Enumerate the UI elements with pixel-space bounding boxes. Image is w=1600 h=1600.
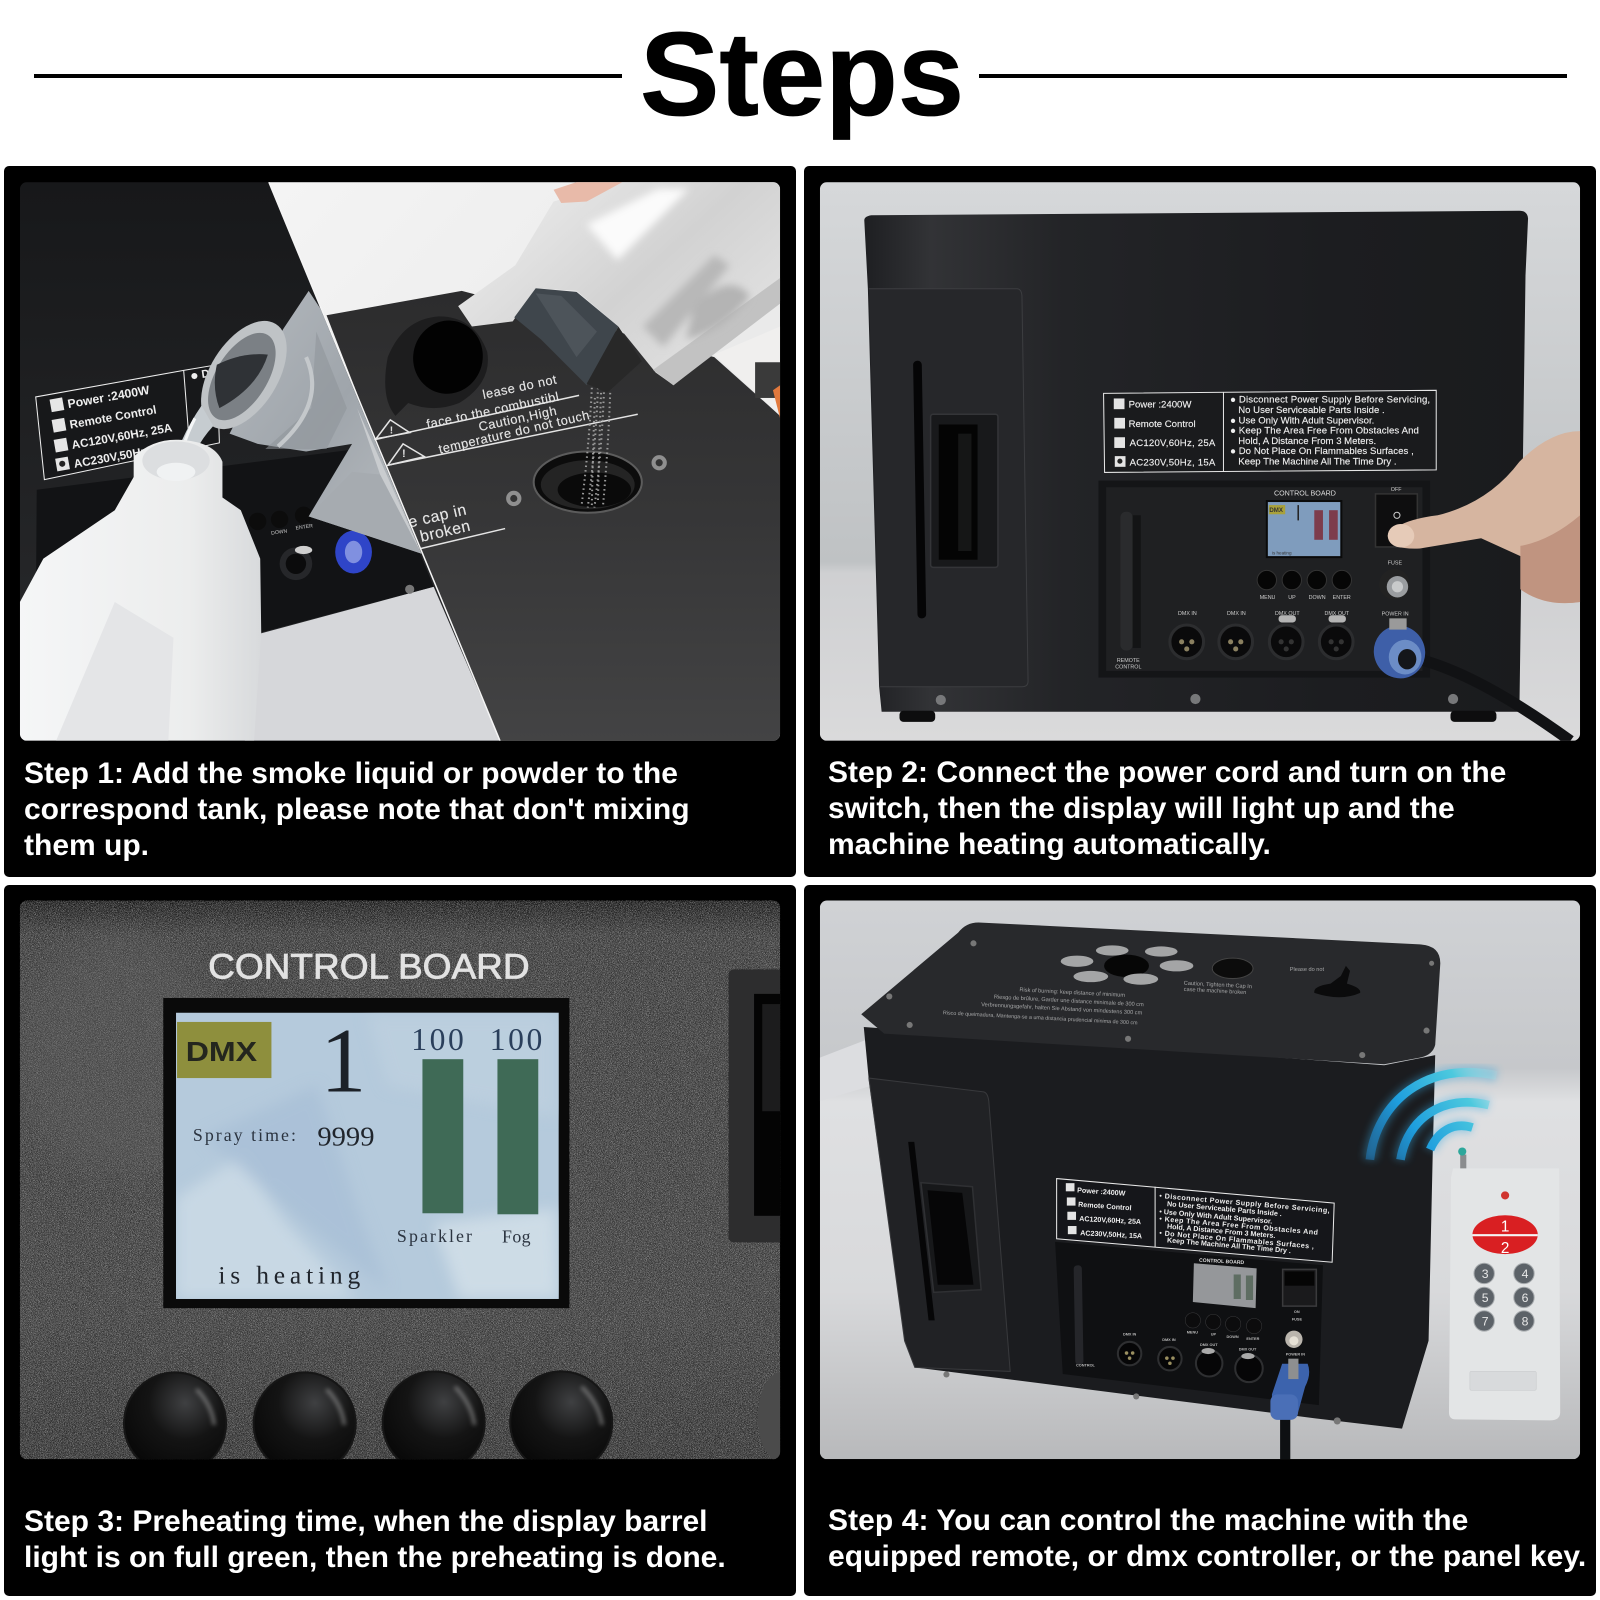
plate text: broken (419, 518, 472, 546)
spec label: AC120V,60Hz, 25A (1079, 1215, 1141, 1226)
remote control: 6 (1522, 1291, 1529, 1305)
spec label: AC230V,50Hz, 15A (1130, 457, 1216, 468)
control board: DMX IN (1123, 1333, 1137, 1337)
spec label (36, 365, 219, 480)
plate text (407, 372, 591, 546)
control board: DMX OUT (1200, 1343, 1218, 1347)
panel: step 3 (4, 885, 809, 1596)
machine body (864, 211, 1528, 722)
plate text: face to the combustibl (425, 389, 560, 432)
control board: MENU (1260, 595, 1276, 601)
plate text: e cap in (407, 502, 468, 531)
top plate holes and vents: Verbrennungsgefahr, halten Sie Abstand von mindestens 300 cm (981, 1002, 1143, 1017)
remote control (1449, 1147, 1560, 1420)
remote control: 1 (1501, 1219, 1509, 1236)
spec label: • Disconnect Power Supply Before Servicing, (1159, 1192, 1330, 1215)
photo: pouring liquid and powder into tanks: ! (390, 426, 393, 437)
caption: step 2: Step 2: Connect the power cord and turn on the (828, 756, 1506, 789)
caption: step 1: Step 1: Add the smoke liquid or powder to the (24, 757, 678, 790)
LCD screen: 1 (320, 1009, 366, 1111)
control board: CONTROL BOARD (1199, 1258, 1245, 1266)
caption: step 4: equipped remote, or dmx controller, or the panel key. (828, 1540, 1586, 1573)
LCD screen: Fog (502, 1226, 531, 1246)
control board: CONTROL BOARD (1274, 489, 1336, 497)
title: Steps with side rules: Steps (640, 8, 964, 141)
spec label: ● Keep The Area Free From Obstacles And (1230, 426, 1419, 437)
panel: step 2 (804, 166, 1596, 877)
remote control: 8 (1522, 1315, 1529, 1329)
control board: FUSE (1388, 560, 1402, 566)
remote control: 5 (1482, 1291, 1489, 1305)
control board: DMX (1269, 507, 1284, 514)
spec label: Remote Control (1129, 419, 1196, 430)
caption: step 4: Step 4: You can control the machine with the (828, 1504, 1468, 1537)
caption: step 3: light is on full green, then the preheating is done. (24, 1541, 726, 1574)
top plate holes and vents: case the machine broken (1184, 987, 1246, 996)
spec label: Keep The Machine All The Time Dry . (1238, 456, 1397, 467)
control board: is heating (1272, 551, 1292, 556)
remote control: 2 (1501, 1240, 1509, 1257)
remote control: 7 (1482, 1315, 1489, 1329)
rocker switch (728, 969, 780, 1242)
spec label: AC230V,50Hz, 15A (73, 440, 176, 471)
spec label: AC120V,60Hz, 25A (1130, 438, 1216, 449)
control board: CONTROL (1115, 664, 1141, 670)
lower table left (245, 587, 500, 741)
control board: ENTER (1246, 1337, 1260, 1341)
control board: UP (1211, 1333, 1216, 1337)
photo: pouring liquid and powder into tanks: ! (402, 448, 406, 460)
icon: wireless signal arcs (1370, 1072, 1496, 1160)
top plate holes and vents (886, 940, 1434, 1424)
control recess left (36, 449, 434, 633)
heading: control board: CONTROL BOARD (208, 948, 530, 987)
title: Steps with side rules (34, 8, 1567, 141)
top plate holes and vents: Riesgo de brûlure, Garder une distance minimale de 300 cm (994, 994, 1144, 1008)
handle (921, 1183, 981, 1292)
LCD screen: DMX (186, 1036, 258, 1067)
top plate holes and vents: Please do not (1290, 967, 1325, 973)
control board: DMX OUT (1324, 611, 1350, 617)
spec label: • Do Not Place On Flammables Surfaces , (1159, 1229, 1314, 1251)
foil bag (458, 182, 780, 393)
photo: rear of machine with power switch (820, 182, 1580, 741)
spec label: Remote Control (69, 403, 157, 432)
control board: DOWN (1227, 1335, 1239, 1339)
machine (861, 922, 1440, 1429)
spec label: Hold, A Distance From 3 Meters. (1167, 1223, 1276, 1240)
spec label: Hold, A Distance From 3 Meters. (1238, 436, 1376, 447)
control board: POWER IN (1286, 1353, 1305, 1357)
control board: ENTER (1333, 595, 1351, 601)
photo: pouring liquid and powder into tanks (20, 182, 780, 741)
icon: black cap (385, 313, 491, 416)
plate text: Caution,High (477, 403, 558, 434)
control board (1098, 481, 1430, 678)
plate text: temperature do not touch (437, 407, 591, 456)
LCD screen: 9999 (317, 1120, 374, 1151)
control board: FUSE (1292, 1317, 1302, 1321)
LCD screen: Sparkler (397, 1226, 472, 1246)
fuse knob (758, 1372, 780, 1460)
control board (1055, 1242, 1323, 1405)
icon: blue powercon plug and cable (1270, 1359, 1309, 1459)
control board: DMX IN (1227, 611, 1246, 617)
control board: ON (1294, 1310, 1300, 1314)
spec label: ● Do Not Place On Flammables Surfaces , (1230, 446, 1414, 457)
white jug (20, 440, 261, 741)
spec label: Power :2400W (1077, 1186, 1126, 1198)
screws (936, 694, 1458, 705)
control board: DMX OUT (1275, 611, 1300, 617)
white seam between halves (269, 182, 500, 741)
liquid stream (182, 406, 213, 444)
photo: pouring liquid and powder into tanks: ENTER (295, 523, 314, 532)
powder stream (582, 388, 610, 508)
control board: MENU (1187, 1331, 1198, 1335)
spec label: Keep The Machine All The Time Dry . (1167, 1236, 1291, 1255)
icon: tank hole (534, 452, 642, 513)
right plate with tank holes (327, 291, 780, 741)
control board: OFF (1391, 487, 1402, 493)
photo: pouring liquid and powder into tanks: DOWN (271, 528, 288, 537)
icon: blue powercon plug and cable (1365, 617, 1570, 741)
control board: REMOTE (1117, 658, 1140, 664)
LCD screen (163, 998, 569, 1308)
caption: step 1: them up. (24, 829, 149, 862)
spec label: • Keep The Area Free From Obstacles And (1159, 1215, 1318, 1237)
spec label: No User Serviceable Parts Inside . (1238, 405, 1385, 416)
spec label (1057, 1179, 1334, 1262)
hand pressing switch (1388, 431, 1580, 603)
top plate holes and vents: Risk of burning: keep distance of minimum (1019, 987, 1125, 999)
photo: LCD control board close-up (15, 901, 809, 1474)
panel: step 1 (4, 166, 796, 877)
spec label: Di (201, 368, 214, 381)
remote control: 4 (1522, 1267, 1529, 1281)
spec label: ● Disconnect Power Supply Before Servicing, (1230, 395, 1430, 406)
control board: DMX OUT (1239, 1348, 1257, 1352)
top plate holes and vents: Caution, Tighten the Cap In (1184, 981, 1252, 990)
door handle (931, 414, 998, 567)
control board: UP (1288, 595, 1296, 601)
DMX badge (177, 1022, 271, 1078)
panel: step 4 (804, 885, 1596, 1596)
LCD screen: is heating (218, 1261, 360, 1290)
spec label (1104, 390, 1436, 472)
control board: CONTROL (1076, 1363, 1096, 1367)
photo: machine with wireless remote (820, 901, 1580, 1459)
spec label: AC230V,50Hz, 15A (1080, 1229, 1142, 1240)
plate text: lease do not (481, 372, 558, 402)
top plate holes and vents: Risco de queimadura, Mantenga-se a uma distancia prudencial minima de 300 cm (943, 1010, 1138, 1027)
LCD screen: 100 (411, 1022, 466, 1057)
remote control: 3 (1482, 1267, 1489, 1281)
control board: POWER IN (1382, 611, 1409, 617)
spec label: ● Use Only With Adult Supervisor. (1230, 415, 1374, 426)
green level bars (422, 1059, 463, 1213)
spec label: Power :2400W (1129, 400, 1191, 411)
caption: step 2: switch, then the display will light up and the (828, 792, 1455, 825)
caption: step 1: correspond tank, please note that don't mixing (24, 793, 690, 826)
silver bottle (183, 291, 421, 554)
control board: DMX IN (1178, 611, 1197, 617)
LCD screen: 100 (490, 1022, 545, 1057)
spec label: • Use Only With Adult Supervisor. (1159, 1208, 1273, 1226)
spec label: No User Serviceable Parts Inside . (1167, 1200, 1282, 1218)
control board: DOWN (1309, 595, 1326, 601)
spec label: Remote Control (1078, 1201, 1132, 1212)
panel buttons (123, 1370, 614, 1459)
LCD screen: Spray time: (193, 1125, 296, 1145)
spec label: AC120V,60Hz, 25A (71, 421, 174, 452)
spec label: Power :2400W (66, 383, 151, 411)
caption: step 2: machine heating automatically. (828, 828, 1271, 861)
control board: DMX IN (1162, 1338, 1176, 1342)
caption: step 3: Step 3: Preheating time, when the display barrel (24, 1505, 708, 1538)
